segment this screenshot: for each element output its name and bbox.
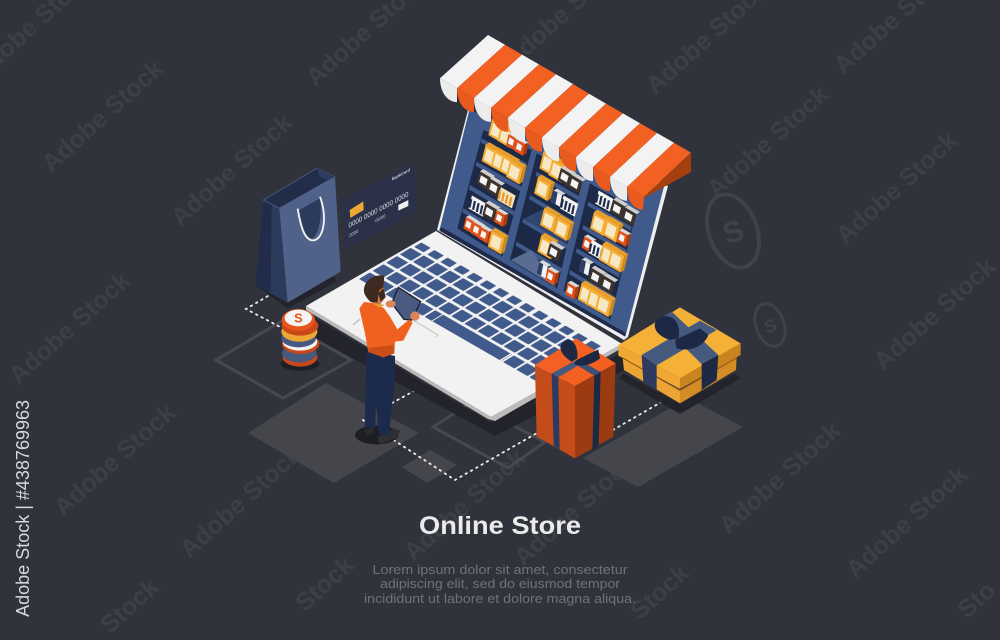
sweater bbox=[359, 302, 413, 357]
collar bbox=[372, 303, 385, 307]
left shoe bbox=[364, 427, 375, 436]
watermarks: Adobe Stock bbox=[831, 126, 963, 250]
yellow gift lower right bbox=[680, 357, 737, 403]
yellow gift bow bbox=[655, 316, 708, 350]
laptop base bbox=[306, 231, 622, 417]
shelf column back centre bbox=[510, 153, 583, 290]
red gift ribbon bbox=[552, 373, 560, 449]
watermarks: Sto bbox=[952, 576, 1000, 624]
card chip bbox=[350, 201, 364, 218]
floor outline: centre bbox=[433, 403, 545, 468]
beard bbox=[378, 288, 386, 302]
lit shelf floors bbox=[523, 209, 568, 244]
red gift bow bbox=[561, 339, 600, 365]
top coin bbox=[282, 309, 315, 331]
screen display and shelves bbox=[439, 110, 664, 337]
yellow gift lid right bbox=[680, 343, 741, 389]
vertical image id: Adobe Stock | #438769963 bbox=[13, 400, 33, 617]
floor outline: left bbox=[216, 321, 351, 398]
spacebar bbox=[430, 313, 513, 362]
card body bbox=[343, 165, 416, 248]
awning side bbox=[644, 153, 691, 198]
floor tile: large right bbox=[583, 398, 743, 487]
laptop bbox=[305, 110, 668, 436]
watermarks: Adobe Stock bbox=[37, 54, 169, 178]
dotted connector lines bbox=[246, 293, 670, 480]
watermarks: Adobe Stock bbox=[49, 398, 181, 522]
coin outline watermark large bbox=[697, 187, 769, 275]
watermarks: Adobe Stock bbox=[869, 252, 1000, 376]
watermarks: Adobe Stock bbox=[175, 440, 307, 564]
touchpad outline bbox=[353, 319, 360, 325]
laptop shadow bbox=[305, 312, 640, 436]
card expiry: 00/00 bbox=[375, 213, 386, 224]
yellow gift ribbons bbox=[642, 321, 717, 365]
bag shadow bbox=[256, 275, 337, 308]
hand on tablet bbox=[386, 300, 396, 308]
bag gusset bbox=[271, 204, 288, 303]
screen bottom edge bbox=[439, 227, 625, 337]
shelf column back right bbox=[563, 183, 637, 322]
body text: adipiscing elit, sed do eiusmod tempor bbox=[380, 576, 621, 591]
bag handle bbox=[298, 197, 324, 240]
keyboard function row bbox=[411, 241, 604, 352]
watermarks: Adobe Stock bbox=[714, 416, 846, 540]
red gift right face bbox=[575, 363, 616, 458]
yellow gift lid gap bbox=[623, 358, 737, 390]
watermarks: Stock bbox=[95, 573, 164, 639]
bank name: BankCard bbox=[392, 167, 410, 182]
awning scallops bbox=[440, 78, 644, 210]
laptop screen bezel bbox=[437, 110, 668, 340]
screen panel bbox=[439, 110, 664, 337]
tablet bbox=[392, 287, 421, 320]
sweater shadow bbox=[368, 345, 394, 357]
body text bbox=[364, 562, 636, 606]
products bbox=[463, 116, 640, 317]
coin outline watermark large: S bbox=[718, 213, 749, 251]
body text: incididunt ut labore et dolore magna aliqua. bbox=[364, 591, 636, 606]
floor tile: small bbox=[402, 450, 457, 483]
watermarks: Stock bbox=[625, 559, 694, 625]
watermarks: Adobe Stock bbox=[841, 460, 973, 584]
awning bbox=[440, 35, 691, 210]
bag front bbox=[279, 177, 341, 303]
neck and face bbox=[369, 283, 386, 305]
title: Online Store bbox=[419, 512, 581, 540]
yellow gift shadow bbox=[619, 373, 741, 414]
trousers bbox=[365, 350, 395, 435]
red gift left face bbox=[535, 365, 575, 458]
bag side bbox=[256, 200, 288, 303]
yellow gift lower left bbox=[623, 358, 680, 403]
man shadow bbox=[355, 426, 398, 444]
watermarks: Adobe Stock bbox=[399, 443, 531, 567]
yellow gift bbox=[618, 307, 741, 414]
laptop base edge bbox=[306, 306, 622, 421]
shopping bag bbox=[256, 168, 341, 308]
card small digits: 0000 bbox=[349, 228, 359, 238]
floor tile: large left bbox=[248, 383, 419, 483]
coin symbol: S bbox=[294, 312, 303, 326]
yellow gift lid top bbox=[618, 307, 741, 378]
coin outline watermark small: S bbox=[761, 314, 779, 337]
shelf column back left bbox=[457, 130, 532, 258]
coin shadow bbox=[281, 357, 319, 371]
yellow gift lid left bbox=[618, 345, 680, 389]
keyboard keys bbox=[357, 246, 594, 385]
awning stripes bbox=[440, 35, 691, 197]
watermarks: Stock bbox=[290, 551, 359, 617]
red gift top bbox=[535, 338, 616, 386]
right shoe bbox=[378, 429, 400, 444]
coin outline watermark small bbox=[749, 300, 791, 350]
bag inner gusset bbox=[317, 168, 335, 181]
card numbers: 0000 0000 0000 0000 bbox=[348, 191, 409, 230]
watermarks: Adobe Stock bbox=[166, 108, 298, 232]
coin stack bbox=[281, 309, 319, 371]
red gift bbox=[535, 338, 616, 458]
bag inside bbox=[263, 168, 335, 208]
hair bbox=[364, 275, 384, 303]
watermarks: Adobe Stock bbox=[4, 266, 136, 390]
shelf boards bbox=[456, 138, 632, 322]
watermarks: Adobe Stock bbox=[702, 80, 834, 204]
bag handle shadow bbox=[299, 198, 321, 238]
card logo bbox=[398, 200, 408, 211]
hand right bbox=[410, 311, 420, 321]
watermarks: Adobe Stock bbox=[509, 448, 641, 572]
body text: Lorem ipsum dolor sit amet, consectetur bbox=[372, 562, 628, 577]
credit card bbox=[343, 165, 416, 248]
man with tablet bbox=[355, 275, 421, 444]
